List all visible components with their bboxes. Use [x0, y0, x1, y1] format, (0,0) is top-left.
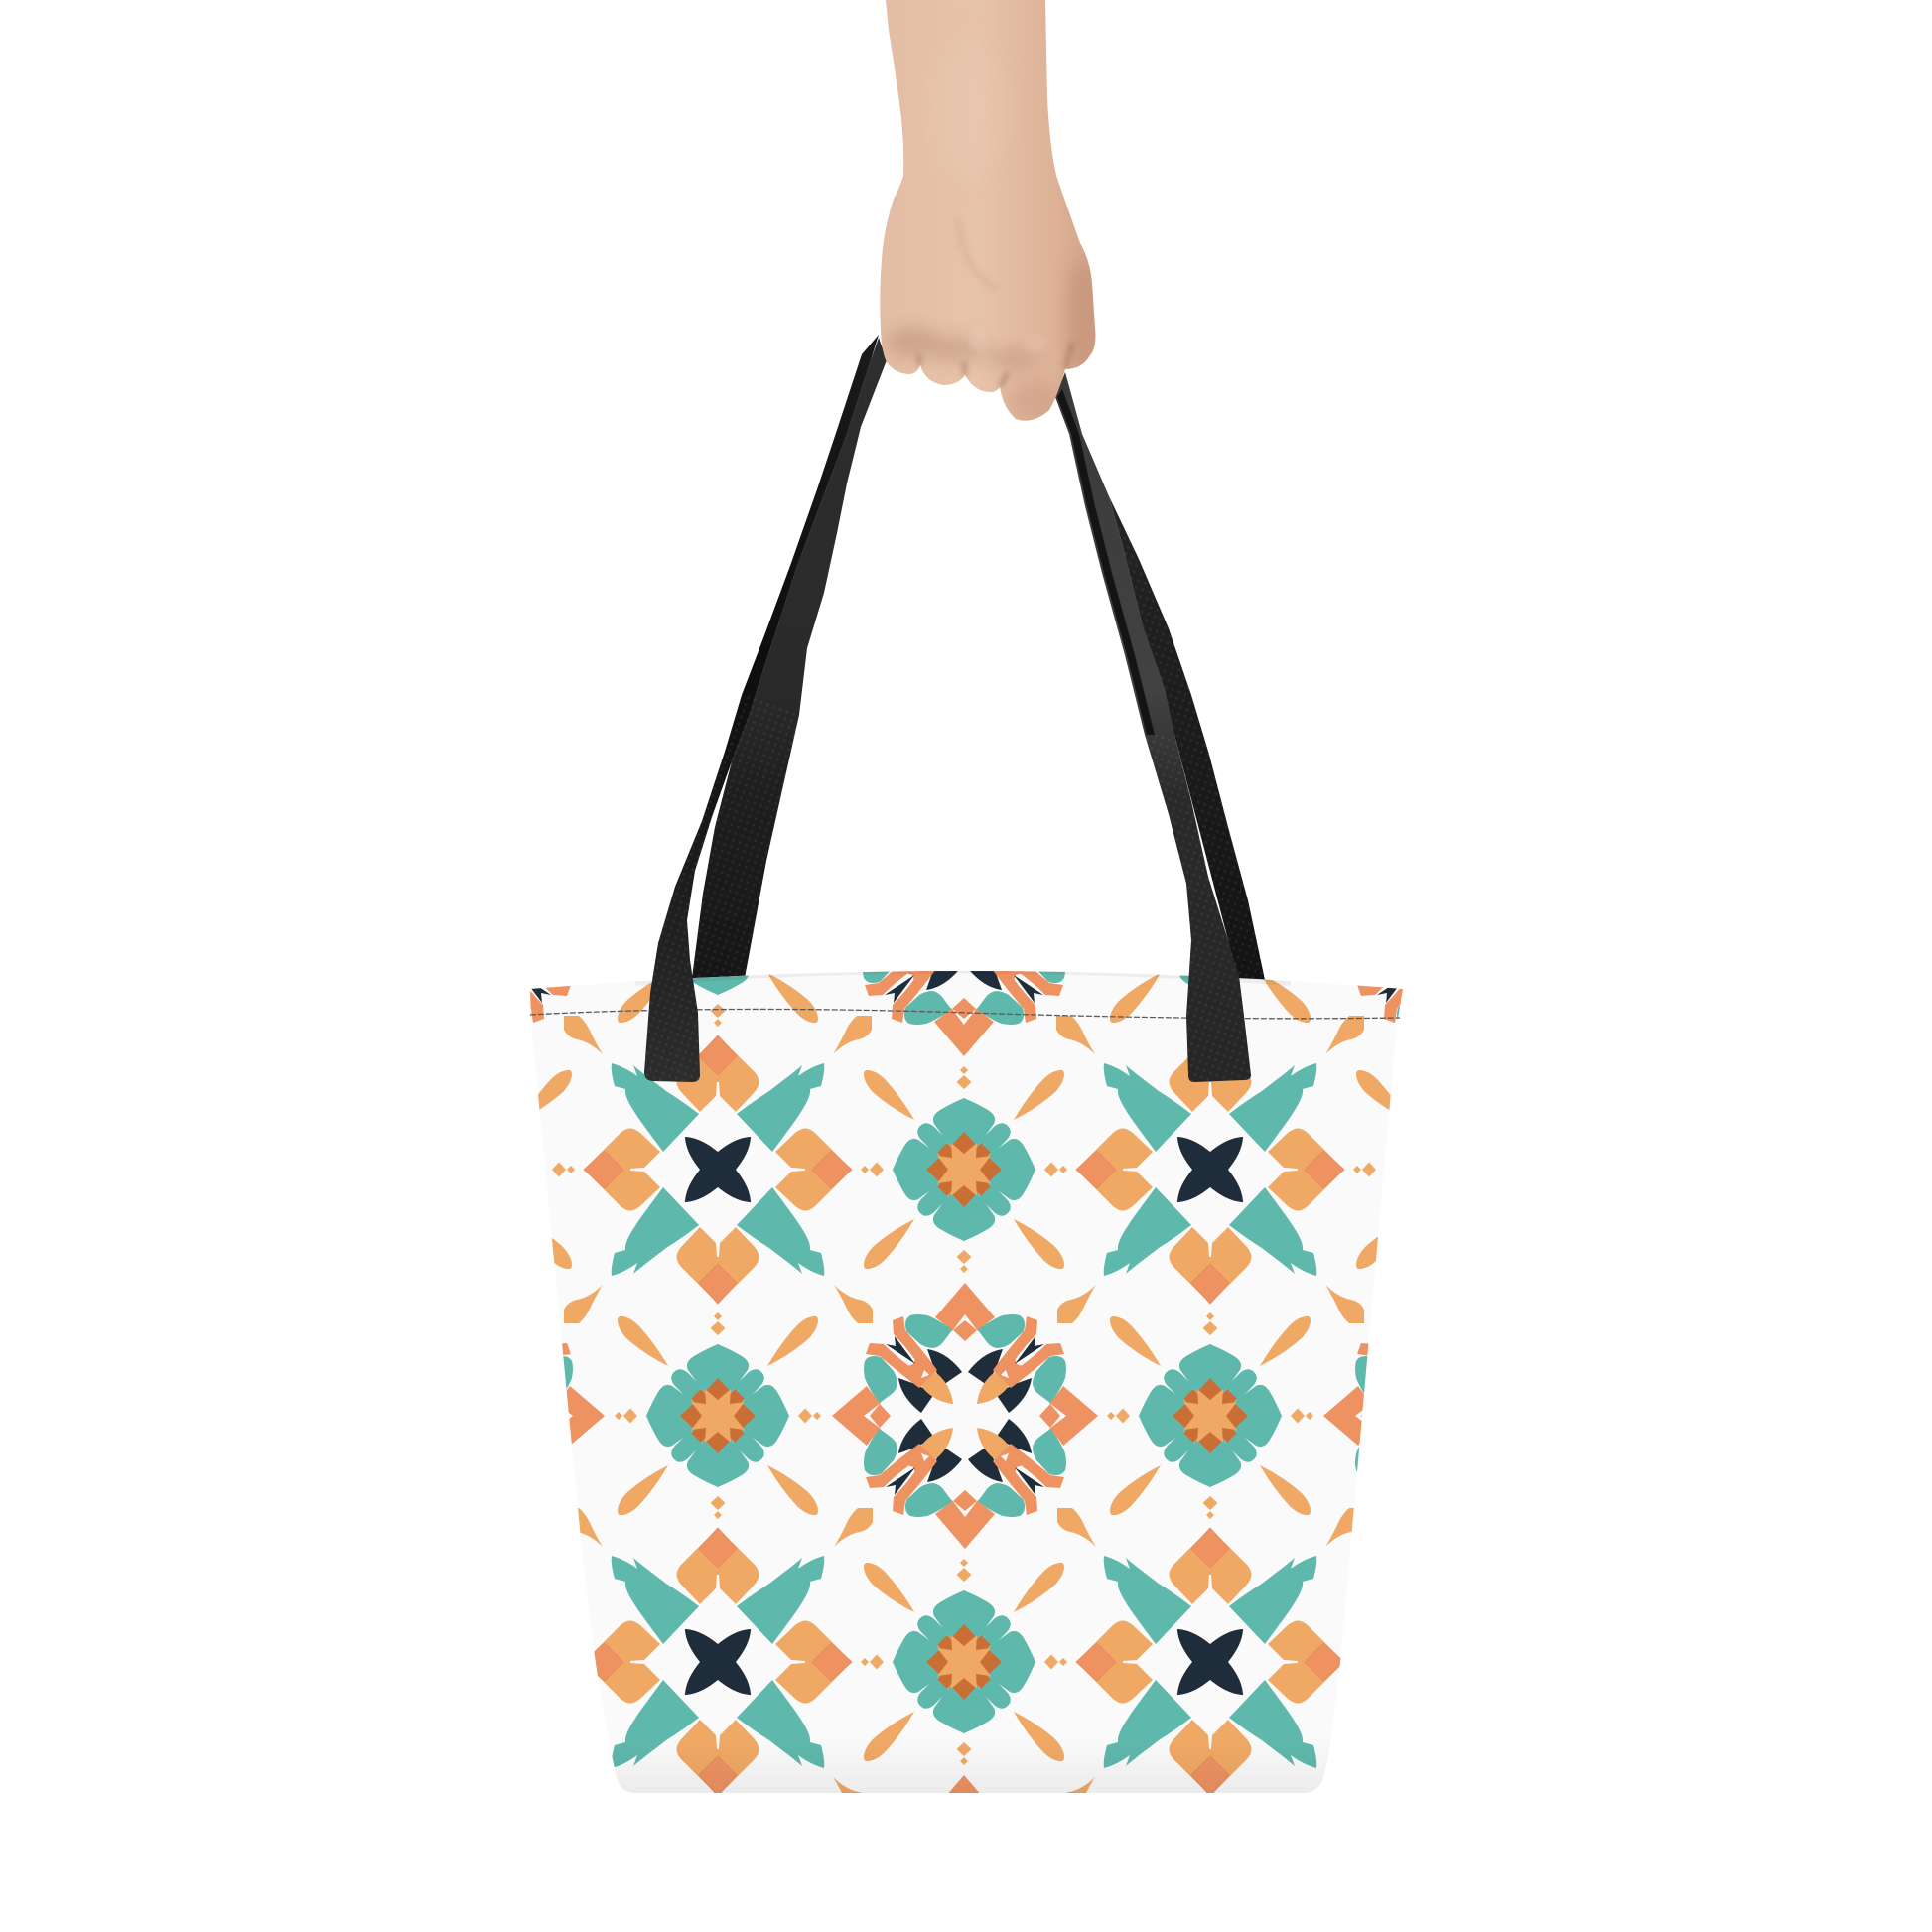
knuckle shading — [886, 327, 941, 358]
tote bag body — [530, 971, 1403, 1793]
front strap: right — [1055, 372, 1251, 1082]
bag print pattern — [339, 790, 1589, 1834]
motifs: medallions — [339, 790, 1589, 1834]
front strap: left — [644, 335, 879, 1082]
product photo: hand holding patterned tote bag — [530, 0, 1403, 1793]
hand and forearm — [880, 0, 1098, 424]
finger creases — [918, 343, 1072, 387]
motifs: flowers — [368, 820, 1560, 1765]
back strap: right — [1109, 496, 1265, 981]
bottom shading — [616, 1769, 1325, 1793]
hem stitching — [530, 1009, 1400, 1019]
bag opening shadow — [635, 971, 1291, 986]
back strap: left — [692, 338, 887, 978]
motifs: cross stars — [584, 1035, 1344, 1796]
